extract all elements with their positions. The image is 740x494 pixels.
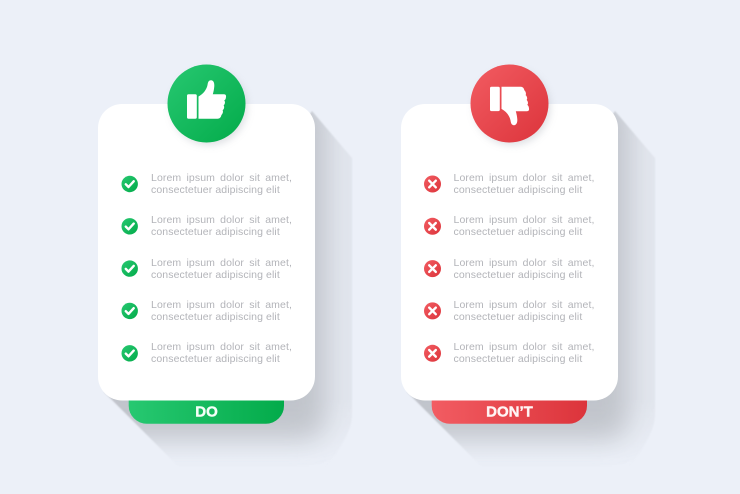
infographic artwork [98,64,654,454]
do item 3: consectetuer adipiscing elit [151,269,280,281]
do item 5 [151,341,292,365]
do item 3: Lorem ipsum dolor sit amet, [151,257,292,269]
label tab: don't [432,395,587,424]
don't item 4: consectetuer adipiscing elit [454,311,582,323]
don't item 5: Lorem ipsum dolor sit amet, [454,341,594,353]
check icons [122,176,138,361]
label tab: do: DO [195,404,218,420]
don't item 3: Lorem ipsum dolor sit amet, [454,257,594,269]
badge: thumbs up [168,64,246,142]
card long shadow [104,111,352,454]
cross icons [424,176,441,362]
don't item 5: consectetuer adipiscing elit [454,353,582,365]
badge: thumbs down [470,64,548,142]
don't item 2: Lorem ipsum dolor sit amet, [454,214,594,226]
don't item 4 [454,299,594,323]
do item 2: Lorem ipsum dolor sit amet, [151,214,292,226]
white card [401,104,618,400]
card long shadow [407,111,654,454]
white card [98,104,315,400]
label tab: do [129,395,284,424]
do item 4 [151,299,292,323]
do item 4: Lorem ipsum dolor sit amet, [151,299,292,311]
do item 5: consectetuer adipiscing elit [151,353,280,365]
label tab: don't: DON’T [486,404,533,420]
don't item 5 [454,341,594,365]
do item 2: consectetuer adipiscing elit [151,226,280,238]
don't item 1: consectetuer adipiscing elit [454,184,582,196]
do item 1: consectetuer adipiscing elit [151,184,280,196]
badge shadow [171,69,247,145]
don't item 1: Lorem ipsum dolor sit amet, [454,172,594,184]
do item 1 [151,172,292,196]
panel: don't card [393,64,663,470]
do list text [151,172,292,365]
don't list text [454,172,594,365]
don't item 3: consectetuer adipiscing elit [454,269,582,281]
do item 1: Lorem ipsum dolor sit amet, [151,172,292,184]
don't item 1 [454,172,594,196]
don't item 3 [454,257,594,281]
panel: do card [90,64,360,470]
badge shadow [474,69,550,145]
do item 3 [151,257,292,281]
don't item 2: consectetuer adipiscing elit [454,226,582,238]
don't item 2 [454,214,594,238]
do item 5: Lorem ipsum dolor sit amet, [151,341,292,353]
do item 4: consectetuer adipiscing elit [151,311,280,323]
do item 2 [151,214,292,238]
don't item 4: Lorem ipsum dolor sit amet, [454,299,594,311]
